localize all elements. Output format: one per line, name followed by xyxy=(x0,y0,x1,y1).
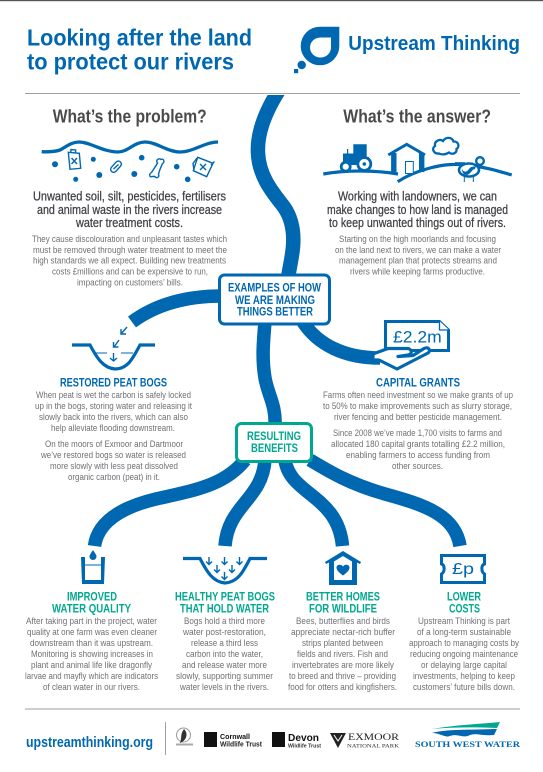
text block: healthy peat bogs: Bogs hold a third more xyxy=(184,616,265,627)
heading: improved water quality: WATER QUALITY xyxy=(52,604,131,616)
text block: improved water quality: downstream than it was upstream. xyxy=(30,638,153,649)
text block: restored peat bogs xyxy=(35,390,192,483)
title xyxy=(27,25,252,74)
text block: improved water quality: quality at one farm was even cleaner xyxy=(27,627,158,638)
heading: healthy peat bogs: THAT HOLD WATER xyxy=(180,604,270,616)
heading: restored peat bogs: RESTORED PEAT BOGS xyxy=(60,378,167,390)
text block: better homes: Bees, butterflies and birds xyxy=(296,616,390,627)
icon: polluted river xyxy=(42,142,218,182)
heading: better homes for wildlife: FOR WILDLIFE xyxy=(309,604,377,616)
icon: money ticket xyxy=(442,556,484,582)
title: Looking after the land xyxy=(27,25,252,51)
heading: improved water quality xyxy=(52,592,131,616)
text block: improved water quality: of clean water in our rivers. xyxy=(43,682,140,693)
icon: restored peat bog xyxy=(72,327,155,369)
logo: Devon Wildlife Trust: Devon xyxy=(288,732,319,744)
heading: improved water quality: IMPROVED xyxy=(67,592,117,604)
heading: better homes for wildlife: BETTER HOMES xyxy=(306,592,380,604)
text block: lower costs xyxy=(409,616,519,693)
text block: problem detail xyxy=(32,234,227,288)
text block: lower costs: Upstream Thinking is part xyxy=(418,616,510,627)
text block: lower costs: of a long-term sustainable xyxy=(417,627,511,638)
heading: capital grants: CAPITAL GRANTS xyxy=(376,378,460,390)
heading: better homes for wildlife xyxy=(306,592,380,616)
text block: better homes: invertebrates are more likely xyxy=(292,660,394,671)
logo: South West Water: SOUTH WEST WATER xyxy=(415,739,521,749)
text block: answer detail xyxy=(335,234,502,278)
text block: answer intro: to keep unwanted things out of rivers. xyxy=(329,215,506,230)
logo: Devon Wildlife Trust: Wildlife Trust xyxy=(288,744,321,750)
text block: capital grants: river fencing and better pesticide management. xyxy=(334,412,502,423)
text block: improved water quality: After taking part in the project, water xyxy=(26,616,158,627)
river: main channel and branches xyxy=(94,84,460,546)
text block: healthy peat bogs: water levels in the rivers. xyxy=(179,682,269,693)
heading: lower costs: LOWER xyxy=(447,592,482,604)
icon: money ticket: £p xyxy=(452,561,474,578)
logo: Cornwall Wildlife Trust: Cornwall xyxy=(220,732,250,741)
logo: rivers trust xyxy=(176,728,193,746)
text block: healthy peat bogs: release a third less xyxy=(191,638,258,649)
text block: healthy peat bogs: water post-restoration, xyxy=(182,627,266,638)
text block: capital grants xyxy=(323,390,513,472)
text block: problem detail: costs £millions and can be expensive to run, xyxy=(52,266,208,278)
logo: Exmoor National Park: EXMOOR xyxy=(348,733,400,743)
text block: improved water quality: larvae and mayfly which are indicators xyxy=(25,671,158,682)
text block: better homes: fields and rivers. Fish and xyxy=(297,649,388,660)
text block: answer detail: Starting on the high moorlands and focusing xyxy=(339,234,496,245)
heading: lower costs: COSTS xyxy=(449,604,480,616)
text block: healthy peat bogs: carbon into the water, xyxy=(186,649,263,660)
text block: restored peat bogs: slowly back into the rivers, which can also xyxy=(39,412,188,423)
logo: Devon Wildlife Trust xyxy=(272,732,321,750)
text block: lower costs: or delaying large capital xyxy=(421,660,507,671)
text block: better homes xyxy=(288,616,397,693)
callout: resulting benefits box: RESULTING xyxy=(247,429,301,443)
text block: capital grants: Since 2008 we’ve made 1,700 visits to farms and xyxy=(333,428,502,439)
text block: better homes: strips planted between xyxy=(302,638,383,649)
text block: better homes: appreciate nectar-rich buffer xyxy=(291,627,396,638)
text block: answer intro xyxy=(327,189,508,230)
text block: healthy peat bogs xyxy=(176,616,274,693)
icon: farm landscape xyxy=(323,138,512,182)
callout: resulting benefits box xyxy=(236,424,312,462)
logo: Exmoor National Park xyxy=(330,733,400,750)
text block: problem detail: high standards we all expect. Building new treatments xyxy=(33,256,226,266)
heading: lower costs xyxy=(447,592,482,616)
text block: restored peat bogs: On the moors of Exmoor and Dartmoor xyxy=(45,439,184,450)
text block: answer detail: management plan that protects streams and xyxy=(339,256,497,266)
icon: hand holding £2.2m: £2.2m xyxy=(393,328,442,346)
barn xyxy=(388,144,425,174)
text block: problem intro: and animal waste in the rivers increase xyxy=(37,202,222,217)
text block: capital grants: enabling farmers to access funding from xyxy=(346,450,490,461)
text block: problem detail: must be removed through water treatment to meet the xyxy=(33,245,227,256)
text block: problem detail: They cause discolouration and unpleasant tastes which xyxy=(32,234,227,245)
text block: restored peat bogs: more slowly with less peat dissolved xyxy=(50,461,178,472)
text block: healthy peat bogs: slowly, supporting summer xyxy=(176,671,274,682)
callout: examples box: THINGS BETTER xyxy=(237,304,313,318)
logo: Upstream Thinking xyxy=(294,27,520,73)
text block: lower costs: customers’ future bills down. xyxy=(413,682,515,693)
text block: improved water quality xyxy=(25,616,158,693)
text block: problem intro: Unwanted soil, silt, pesticides, fertilisers xyxy=(33,189,226,204)
text block: lower costs: approach to managing costs by xyxy=(409,638,519,649)
logo: South West Water xyxy=(415,722,521,749)
callout: examples box: WE ARE MAKING xyxy=(235,293,315,307)
text block: capital grants: allocated 180 capital grants totalling £2.2 million, xyxy=(331,439,505,450)
cloud xyxy=(433,138,458,154)
text block: restored peat bogs: we’ve restored bogs so water is released xyxy=(40,450,186,461)
text block: restored peat bogs: up in the bogs, storing water and releasing it xyxy=(35,401,192,412)
logo: Cornwall Wildlife Trust: Wildlife Trust xyxy=(220,740,262,748)
website address: upstreamthinking.org xyxy=(26,735,153,751)
text block: answer detail: on the land next to rivers, we can make a water xyxy=(335,245,502,256)
icon: glass of water xyxy=(81,550,105,584)
sheep xyxy=(455,157,484,182)
text block: restored peat bogs: When peat is wet the carbon is safely locked xyxy=(36,390,191,401)
text block: lower costs: investments, helping to keep xyxy=(413,671,515,682)
text block: improved water quality: plant and animal life like dragonfly xyxy=(31,660,152,671)
text block: improved water quality: Monitoring is showing increases in xyxy=(31,649,153,660)
text block: answer detail: rivers while keeping farms productive. xyxy=(350,266,485,278)
text block: restored peat bogs: organic carbon (peat) in it. xyxy=(68,472,160,483)
text block: lower costs: reducing ongoing maintenance xyxy=(410,649,518,660)
text block: answer intro: Working with landowners, we can xyxy=(338,189,497,204)
logo: Exmoor National Park: NATIONAL PARK xyxy=(347,744,400,750)
text block: better homes: food for otters and kingfishers. xyxy=(288,682,397,693)
text block: answer intro: make changes to how land is managed xyxy=(327,202,508,217)
icon: healthy peat bog xyxy=(183,557,267,583)
text block: problem intro: water treatment costs. xyxy=(75,215,183,230)
text block: better homes: to breed and thrive – providing xyxy=(289,671,396,682)
heading: healthy peat bogs xyxy=(175,592,275,616)
logo: Cornwall Wildlife Trust xyxy=(204,732,262,748)
callout: examples box: EXAMPLES OF HOW xyxy=(228,281,322,295)
logo: Upstream Thinking: Upstream Thinking xyxy=(348,33,520,55)
text block: problem detail: impacting on customers’ bills. xyxy=(77,278,183,288)
heading: What's the problem?: What’s the problem? xyxy=(53,107,207,127)
icon: wildlife home xyxy=(325,551,361,585)
heading: healthy peat bogs: HEALTHY PEAT BOGS xyxy=(175,592,275,604)
callout: examples box xyxy=(220,275,330,324)
tractor xyxy=(341,144,371,171)
text block: problem intro xyxy=(33,189,226,230)
heading: What's the answer?: What’s the answer? xyxy=(343,107,491,127)
text block: healthy peat bogs: and release water more xyxy=(182,660,267,671)
icon: hand holding £2.2m xyxy=(373,321,449,369)
title: to protect our rivers xyxy=(27,48,234,74)
text block: capital grants: other sources. xyxy=(392,461,443,472)
callout: resulting benefits box: BENEFITS xyxy=(251,441,298,455)
text block: restored peat bogs: help alleviate flooding downstream. xyxy=(51,423,175,434)
